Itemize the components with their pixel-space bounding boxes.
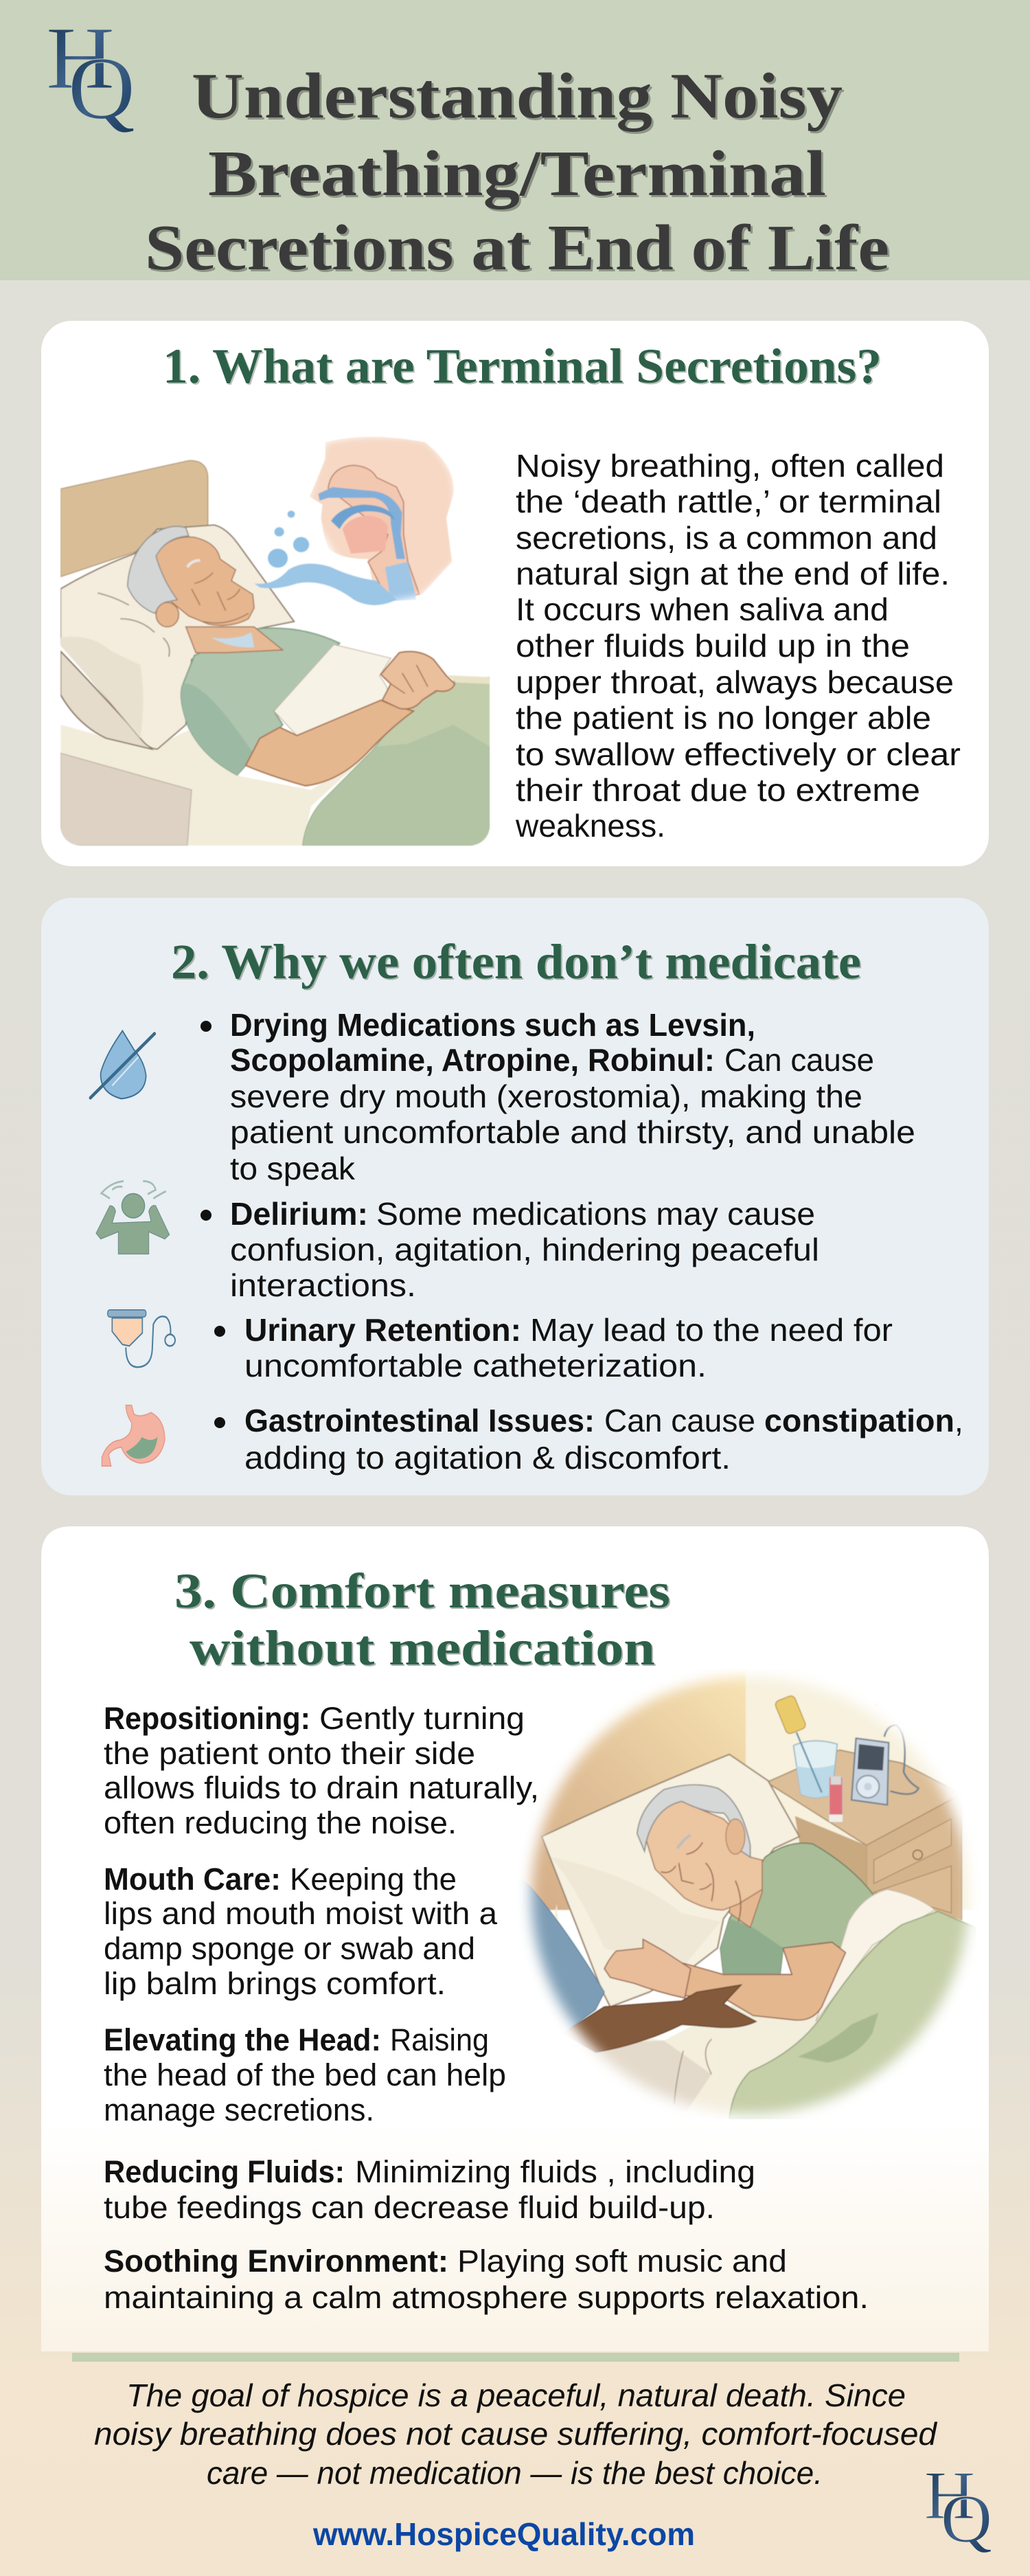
bullet: delirium bbox=[201, 1196, 819, 1303]
text: mouth care: lips and mouth moist with a bbox=[104, 1896, 498, 1931]
text: definition: upper throat, always because bbox=[516, 664, 954, 700]
bullet: delirium: Delirium: bbox=[230, 1196, 368, 1232]
panel: why we often don't medicate bbox=[41, 898, 989, 1495]
text: definition: their throat due to extreme bbox=[516, 772, 920, 808]
text: definition: weakness. bbox=[515, 808, 665, 844]
text: definition: It occurs when saliva and bbox=[516, 591, 889, 627]
text: mouth care bbox=[104, 1862, 498, 2001]
bullet: drying medications: Can cause bbox=[724, 1042, 874, 1078]
title bbox=[145, 60, 889, 284]
text: definition: the ‘death rattle,’ or terminal bbox=[516, 484, 941, 519]
text: reducing fluids: Minimizing fluids , including bbox=[355, 2154, 755, 2189]
icon: crossed-out water drop bbox=[91, 1031, 154, 1098]
text: repositioning: the patient onto their side bbox=[104, 1736, 475, 1771]
bullet: drying medications bbox=[201, 1007, 915, 1186]
text: mouth care: damp sponge or swab and bbox=[104, 1931, 475, 1966]
icon: catheter bag bbox=[108, 1310, 175, 1367]
text: mouth care: Mouth Care: bbox=[104, 1862, 281, 1897]
text: soothing environment: maintaining a calm atmosphere supports relaxation. bbox=[104, 2280, 869, 2315]
logo: HQ top: Q bbox=[68, 39, 135, 138]
text: soothing environment: Soothing Environment: bbox=[104, 2244, 448, 2279]
title: Secretions at End of Life bbox=[145, 212, 889, 284]
text: elevating the head bbox=[104, 2022, 506, 2127]
bullet: urinary retention: May lead to the need for bbox=[530, 1312, 893, 1348]
text: definition: the patient is no longer able bbox=[516, 700, 931, 736]
logo: HQ bottom: H bbox=[924, 2457, 975, 2533]
bullet: urinary retention bbox=[214, 1312, 893, 1383]
text: elevating the head: the head of the bed can help bbox=[104, 2057, 506, 2092]
heading: section 3: 3. Comfort measures bbox=[174, 1563, 670, 1618]
heading: section 3: without medication bbox=[190, 1620, 655, 1675]
logo: HQ top bbox=[46, 9, 135, 138]
text: reducing fluids bbox=[104, 2154, 755, 2225]
text: mouth care: Keeping the bbox=[290, 1862, 457, 1897]
illustration: patient in bed with airway inset bbox=[60, 437, 490, 846]
callout: closing statement bbox=[94, 2377, 937, 2491]
icon: agitated person bbox=[96, 1181, 170, 1254]
heading: section 1: 1. What are Terminal Secretions? bbox=[163, 339, 882, 394]
text: repositioning bbox=[104, 1701, 539, 1840]
text: elevating the head: Raising bbox=[390, 2022, 489, 2057]
text: repositioning: Gently turning bbox=[319, 1701, 525, 1736]
title: Understanding Noisy bbox=[192, 60, 843, 132]
text: soothing environment: Playing soft music and bbox=[457, 2244, 787, 2279]
text: definition: to swallow effectively or clear bbox=[516, 736, 961, 772]
bullet: gastrointestinal issues: Gastrointestinal Issues: bbox=[244, 1403, 595, 1438]
text: reducing fluids: Reducing Fluids: bbox=[104, 2154, 345, 2189]
bullet: urinary retention: uncomfortable catheterization. bbox=[244, 1348, 707, 1383]
text: definition: secretions, is a common and bbox=[516, 520, 937, 556]
bullet: drying medications: patient uncomfortable and thirsty, and unable bbox=[230, 1114, 915, 1150]
panel: comfort measures without medication bbox=[41, 1526, 989, 2351]
text: reducing fluids: tube feedings can decrease fluid build-up. bbox=[104, 2190, 715, 2225]
bullet: gastrointestinal issues: constipation bbox=[764, 1403, 954, 1438]
text: repositioning: Repositioning: bbox=[104, 1701, 310, 1736]
text: repositioning: often reducing the noise. bbox=[104, 1805, 457, 1840]
logo: HQ bottom: Q bbox=[941, 2481, 992, 2557]
bullet: delirium: confusion, agitation, hindering peaceful bbox=[230, 1232, 819, 1267]
text: elevating the head: manage secretions. bbox=[104, 2092, 374, 2127]
text: elevating the head: Elevating the Head: bbox=[104, 2022, 381, 2057]
callout: closing statement: noisy breathing does not cause suffering, comfort-focused bbox=[94, 2416, 937, 2452]
text: repositioning: allows fluids to drain naturally, bbox=[104, 1770, 539, 1805]
logo: HQ top: H bbox=[46, 9, 115, 108]
heading: section 2: 2. Why we often don’t medicate bbox=[171, 934, 861, 989]
text: definition: natural sign at the end of life. bbox=[516, 556, 950, 591]
callout: closing statement: The goal of hospice is a peaceful, natural death. Since bbox=[126, 2377, 906, 2413]
illustration: caregiver holding sleeping patient's arm bbox=[515, 1669, 984, 2119]
bullet: drying medications: Drying Medications such as Levsin, bbox=[230, 1007, 755, 1043]
bullet: drying medications: severe dry mouth (xerostomia), making the bbox=[230, 1078, 862, 1114]
panel: what are terminal secretions bbox=[41, 321, 989, 866]
bullet: urinary retention: Urinary Retention: bbox=[244, 1312, 521, 1348]
bullet: delirium: interactions. bbox=[230, 1267, 416, 1303]
logo: HQ bottom bbox=[924, 2457, 992, 2557]
website link text: www.HospiceQuality.com bbox=[312, 2516, 695, 2552]
bullet: drying medications: to speak bbox=[230, 1151, 356, 1186]
bullet: drying medications: Scopolamine, Atropine, Robinul: bbox=[230, 1042, 715, 1078]
text: soothing environment bbox=[104, 2244, 869, 2315]
title: Breathing/Terminal bbox=[208, 138, 826, 210]
heading: section 3 bbox=[174, 1563, 670, 1675]
bullet: gastrointestinal issues: adding to agitation & discomfort. bbox=[244, 1440, 731, 1476]
bullet: gastrointestinal issues: , bbox=[954, 1403, 963, 1438]
callout: closing statement: care — not medication — is the best choice. bbox=[207, 2455, 823, 2491]
text: mouth care: lip balm brings comfort. bbox=[104, 1966, 446, 2001]
bullet: delirium: Some medications may cause bbox=[376, 1196, 815, 1232]
text: definition: other fluids build up in the bbox=[516, 628, 910, 664]
bullet: gastrointestinal issues bbox=[214, 1403, 963, 1476]
icon: stomach bbox=[102, 1405, 165, 1466]
header band bbox=[0, 0, 1030, 280]
text: definition bbox=[515, 448, 961, 844]
bullet: gastrointestinal issues: Can cause bbox=[604, 1403, 755, 1438]
text: definition: Noisy breathing, often called bbox=[516, 448, 944, 484]
